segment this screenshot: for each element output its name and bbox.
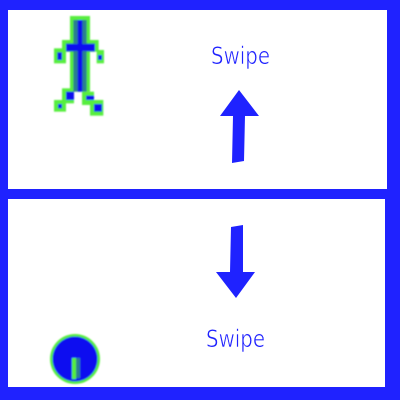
heading: swipe bottom: Swipe — [206, 325, 265, 353]
icon: stick figure — [54, 16, 104, 116]
arrow: up — [220, 90, 259, 163]
panel: bottom — [8, 199, 385, 387]
arrow: down — [216, 225, 255, 298]
panel: top — [8, 10, 387, 189]
icon: round character — [50, 334, 100, 384]
heading: swipe top: Swipe — [211, 42, 270, 70]
